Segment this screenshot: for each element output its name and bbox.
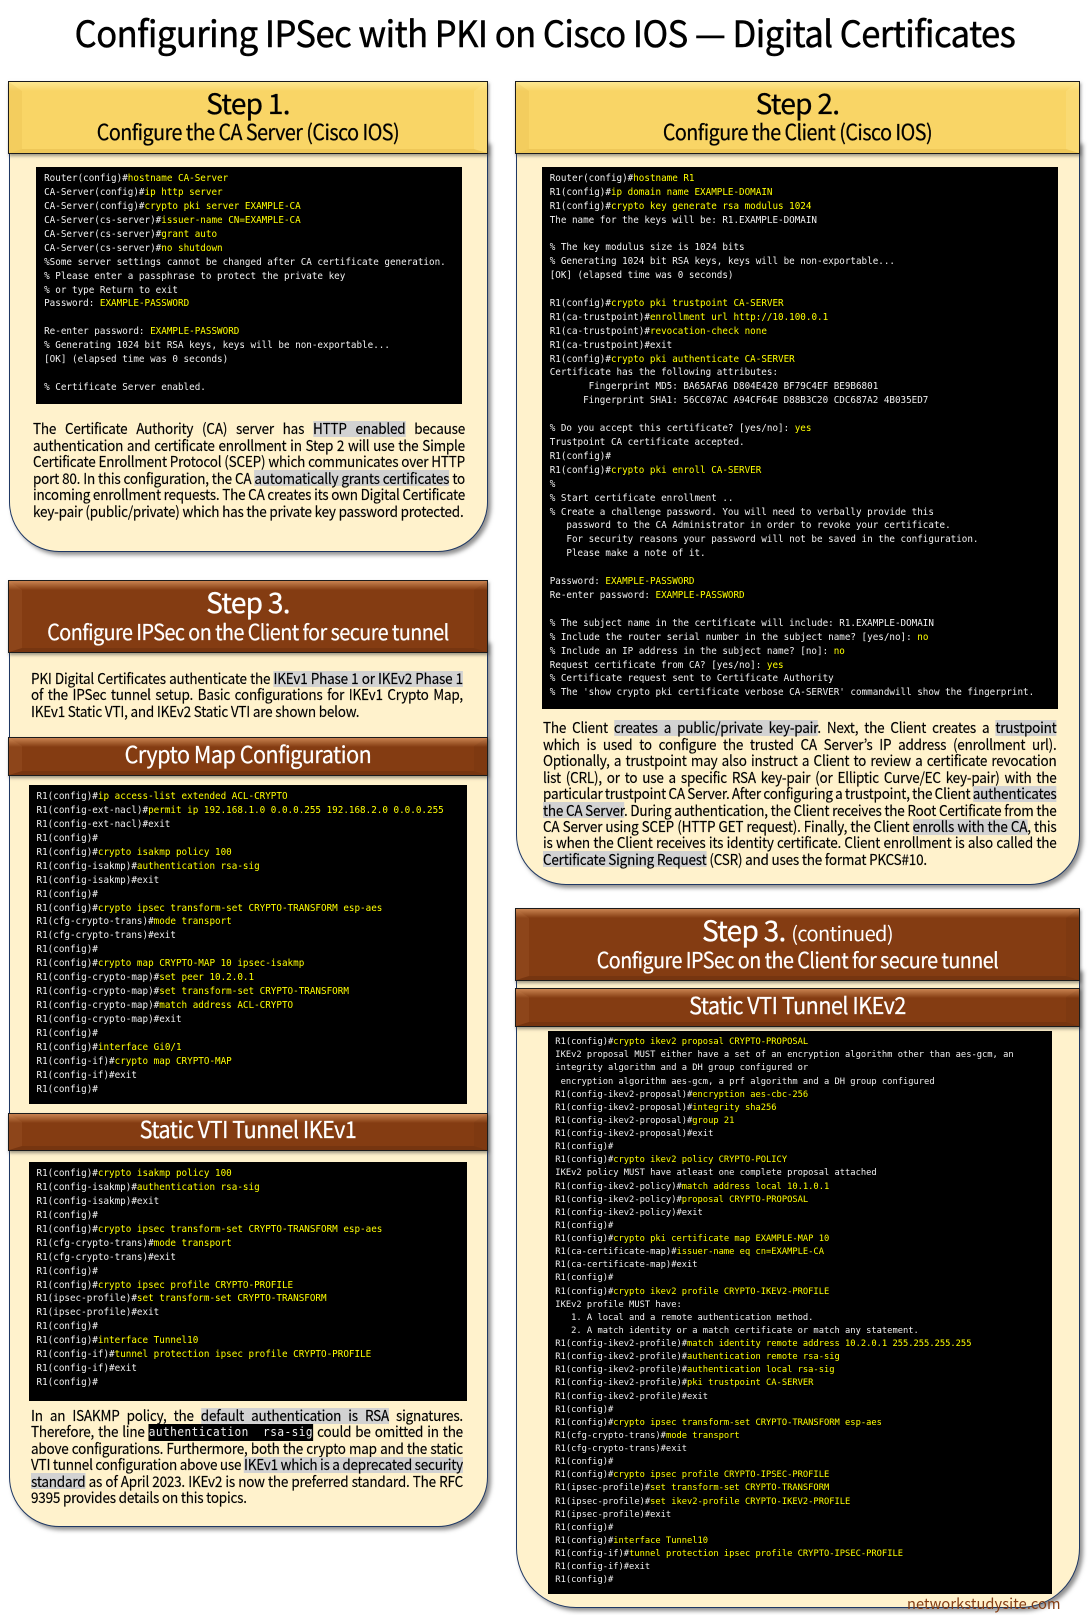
heading: step 1: Configure the CA Server (Cisco IOS) — [97, 116, 399, 147]
text block: CA server explanation — [33, 418, 465, 522]
text block: step 3 introduction: PKI Digital Certificates authenticate the IKEv1 Phase 1 or IKEv2 Phase 1 — [31, 668, 463, 689]
text block: client explanation: the CA Server. During authentication, the Client receives the Root Certificate from the — [543, 800, 1056, 821]
heading: step 3 continued — [515, 908, 1080, 981]
title: Configuring IPSec with PKI on Cisco IOS — Digital Certificates — [75, 6, 1015, 58]
heading: crypto map configuration: Crypto Map Configuration — [125, 736, 371, 770]
text block: step 3 introduction: IKEv1 Static VTI, and IKEv2 Static VTI are shown below. — [31, 701, 359, 722]
text block: ISAKMP default note: In an ISAKMP policy, the default authentication is RSA signatures. — [31, 1405, 463, 1426]
text block: client explanation: Certificate Signing Request (CSR) and uses the format PKCS#10. — [543, 849, 927, 870]
watermark: networkstudysite.com — [907, 1593, 1061, 1614]
text block: ISAKMP default note: authentication rsa-sig — [149, 1425, 313, 1439]
text block: ISAKMP default note: Therefore, the line could be omitted in the — [31, 1421, 463, 1442]
heading: crypto map configuration — [8, 737, 488, 776]
heading: static VTI tunnel IKEv2: Static VTI Tunnel IKEv2 — [689, 987, 906, 1021]
terminal: CA server configuration: Router(config)#hostname CA-Server CA-Server(config)#ip http server CA-Server(config)#crypto pki server EXAMPLE-CA CA-Server(cs-server)#issuer-name CN=EXAMPLE-CA CA-Server(cs-server)#grant auto CA-Server(cs-server)#no shutdown %Some server settings cannot be changed after CA certificate generation. % Please enter a passphrase to protect the private key % or type Return to exit Password: EXAMPLE-PASSWORD Re-enter password: EXAMPLE-PASSWORD % Generating 1024 bit RSA keys, keys will be non-exportable... [OK] (elapsed time was 0 seconds) % Certificate Server enabled. — [44, 173, 446, 393]
heading: step 1: Step 1. — [206, 83, 290, 123]
heading: static VTI tunnel IKEv1 — [8, 1112, 488, 1151]
heading: static VTI tunnel IKEv1: Static VTI Tunnel IKEv1 — [140, 1111, 356, 1145]
terminal: client configuration: Router(config)#hostname R1 R1(config)#ip domain name EXAMPLE-DOMAIN R1(config)#crypto key generate rsa modulus 1024 The name for the keys will be: R1.EXAMPLE-DOMAIN % The key modulus size is 1024 bits % Generating 1024 bit RSA keys, keys will be non-exportable... [OK] (elapsed time was 0 seconds) R1(config)#crypto pki trustpoint CA-SERVER R1(ca-trustpoint)#enrollment url http://10.100.0.1 R1(ca-trustpoint)#revocation-check none R1(ca-trustpoint)#exit R1(config)#crypto pki authenticate CA-SERVER Certificate has the following attributes: Fingerprint MD5: BA65AFA6 D804E420 BF79C4EF BE9B6801 Fingerprint SHA1: 56CC07AC A94CF64E D88B3C20 CDC687A2 4B035ED7 % Do you accept this certificate? [yes/no]: yes Trustpoint CA certificate accepted. R1(config)# R1(config)#crypto pki enroll CA-SERVER % % Start certificate enrollment .. % Create a challenge password. You will need to verbally provide this password to the CA Administrator in order to revoke your certificate. For security reasons your password will not be saved in the configuration. Please make a note of it. Password: EXAMPLE-PASSWORD Re-enter password: EXAMPLE-PASSWORD % The subject name in the certificate will include: R1.EXAMPLE-DOMAIN % Include the router serial number in the subject name? [yes/no]: no % Include an IP address in the subject name? [no]: no Request certificate from CA? [yes/no]: yes % Certificate request sent to Certificate Authority % The 'show crypto pki certificate verbose CA-SERVER' commandwill show the fingerprint. — [550, 173, 1034, 698]
panel: step 1 configure the CA server — [7, 81, 494, 558]
text block: client explanation: CA Server using SCEP (HTTP GET request). Finally, the Client enrolls with the CA, this — [543, 816, 1056, 837]
text block: ISAKMP default note: 9395 provides details on this topics. — [31, 1487, 247, 1508]
text block: client explanation: particular trustpoint CA Server. After configuring a trustpoint, the Client authenticates — [543, 783, 1056, 804]
terminal: static VTI IKEv1 configuration: R1(config)#crypto isakmp policy 100 R1(config-isakmp)#authentication rsa-sig R1(config-isakmp)#exit R1(config)# R1(config)#crypto ipsec transform-set CRYPTO-TRANSFORM esp-aes R1(cfg-crypto-trans)#mode transport R1(cfg-crypto-trans)#exit R1(config)# R1(config)#crypto ipsec profile CRYPTO-PROFILE R1(ipsec-profile)#set transform-set CRYPTO-TRANSFORM R1(ipsec-profile)#exit R1(config)# R1(config)#interface Tunnel10 R1(config-if)#tunnel protection ipsec profile CRYPTO-PROFILE R1(config-if)#exit R1(config)# — [36, 1168, 382, 1388]
text block: ISAKMP default note: VTI tunnel configuration above use IKEv1 which is a deprecated security — [31, 1454, 463, 1475]
panel: step 3 continued — [514, 908, 1086, 1614]
text block: CA server explanation: The Certificate Authority (CA) server has HTTP enabled because — [33, 418, 465, 439]
text block: step 3 introduction: of the IPSec tunnel setup. Basic configurations for IKEv1 Crypto Map, — [31, 684, 463, 705]
heading: step 3 — [8, 580, 488, 653]
heading: step 3: Configure IPSec on the Client for secure tunnel — [47, 616, 449, 646]
text block: client explanation: is when the Client receives its identity certificate. Client enrollment is also called the — [543, 832, 1056, 853]
text block: ISAKMP default note: above configurations. Furthermore, both the crypto map and the static — [31, 1438, 463, 1459]
text block: client explanation: The Client creates a public/private key-pair. Next, the Client creates a trustpoint — [543, 717, 1056, 738]
heading: step 3 continued: Configure IPSec on the Client for secure tunnel — [597, 944, 998, 974]
heading: step 3 continued: Step 3. (continued) — [702, 910, 893, 950]
terminal: crypto map configuration: R1(config)#ip access-list extended ACL-CRYPTO R1(config-ext-nacl)#permit ip 192.168.1.0 0.0.0.255 192.168.2.0 0.0.0.255 R1(config-ext-nacl)#exit R1(config)# R1(config)#crypto isakmp policy 100 R1(config-isakmp)#authentication rsa-sig R1(config-isakmp)#exit R1(config)# R1(config)#crypto ipsec transform-set CRYPTO-TRANSFORM esp-aes R1(cfg-crypto-trans)#mode transport R1(cfg-crypto-trans)#exit R1(config)# R1(config)#crypto map CRYPTO-MAP 10 ipsec-isakmp R1(config-crypto-map)#set peer 10.2.0.1 R1(config-crypto-map)#set transform-set CRYPTO-TRANSFORM R1(config-crypto-map)#match address ACL-CRYPTO R1(config-crypto-map)#exit R1(config)# R1(config)#interface Gi0/1 R1(config-if)#crypto map CRYPTO-MAP R1(config-if)#exit R1(config)# — [36, 791, 444, 1095]
heading: static VTI tunnel IKEv2 — [515, 988, 1080, 1027]
heading: step 2: Configure the Client (Cisco IOS) — [663, 116, 932, 147]
heading: step 1 — [8, 81, 488, 154]
heading: step 2 — [515, 81, 1080, 154]
text block: step 3 introduction — [31, 668, 463, 722]
panel: step 2 configure the client — [514, 81, 1086, 891]
text block: CA server explanation: key-pair (public/private) which has the private key password protected. — [33, 501, 464, 522]
text block: CA server explanation: authentication and certificate enrollment in Step 2 will use the Simple — [33, 435, 465, 456]
text block: client explanation: list (CRL), or to use a specific RSA key-pair (or Elliptic Curve/EC key-pair) with the — [543, 767, 1056, 788]
heading: step 3: Step 3. — [206, 582, 290, 622]
panel: step 3 configure IPSec on the client — [7, 580, 494, 1533]
text block: client explanation: Optionally, a trustpoint may also instruct a Client to review a certificate revocation — [543, 750, 1056, 771]
text block: CA server explanation: Certificate Enrollment Protocol (SCEP) which communicates over HTTP — [33, 451, 465, 472]
text block: CA server explanation: port 80. In this configuration, the CA automatically grants certificates to — [33, 468, 465, 489]
terminal: static VTI IKEv2 configuration: R1(config)#crypto ikev2 proposal CRYPTO-PROPOSAL IKEv2 proposal MUST either have a set of an encryption algorithm other than aes-gcm, an integrity algorithm and a DH group configured or encryption algorithm aes-gcm, a prf algorithm and a DH group configured R1(config-ikev2-proposal)#encryption aes-cbc-256 R1(config-ikev2-proposal)#integrity sha256 R1(config-ikev2-proposal)#group 21 R1(config-ikev2-proposal)#exit R1(config)# R1(config)#crypto ikev2 policy CRYPTO-POLICY IKEv2 policy MUST have atleast one complete proposal attached R1(config-ikev2-policy)#match address local 10.1.0.1 R1(config-ikev2-policy)#proposal CRYPTO-PROPOSAL R1(config-ikev2-policy)#exit R1(config)# R1(config)#crypto pki certificate map EXAMPLE-MAP 10 R1(ca-certificate-map)#issuer-name eq cn=EXAMPLE-CA R1(ca-certificate-map)#exit R1(config)# R1(config)#crypto ikev2 profile CRYPTO-IKEV2-PROFILE IKEv2 profile MUST have: 1. A local and a remote authentication method. 2. A match identity or a match certificate or match any statement. R1(config-ikev2-profile)#match identity remote address 10.2.0.1 255.255.255.255 R1(config-ikev2-profile)#authentication remote rsa-sig R1(config-ikev2-profile)#authentication local rsa-sig R1(config-ikev2-profile)#pki trustpoint CA-SERVER R1(config-ikev2-profile)#exit R1(config)# R1(config)#crypto ipsec transform-set CRYPTO-TRANSFORM esp-aes R1(cfg-crypto-trans)#mode transport R1(cfg-crypto-trans)#exit R1(config)# R1(config)#crypto ipsec profile CRYPTO-IPSEC-PROFILE R1(ipsec-profile)#set transform-set CRYPTO-TRANSFORM R1(ipsec-profile)#set ikev2-profile CRYPTO-IKEV2-PROFILE R1(ipsec-profile)#exit R1(config)# R1(config)#interface Tunnel10 R1(config-if)#tunnel protection ipsec profile CRYPTO-IPSEC-PROFILE R1(config-if)#exit R1(config)# — [555, 1037, 1014, 1585]
text block: CA server explanation: incoming enrollment requests. The CA creates its own Digital Certificate — [33, 484, 465, 505]
text block: client explanation — [543, 717, 1057, 870]
heading: step 2: Step 2. — [756, 83, 839, 123]
text block: ISAKMP default note: standard as of April 2023. IKEv2 is now the preferred standard. The RFC — [31, 1471, 463, 1492]
text block: ISAKMP default note — [31, 1405, 463, 1508]
text block: client explanation: which is used to configure the trusted CA Server’s IP address (enrollment url). — [543, 734, 1056, 755]
